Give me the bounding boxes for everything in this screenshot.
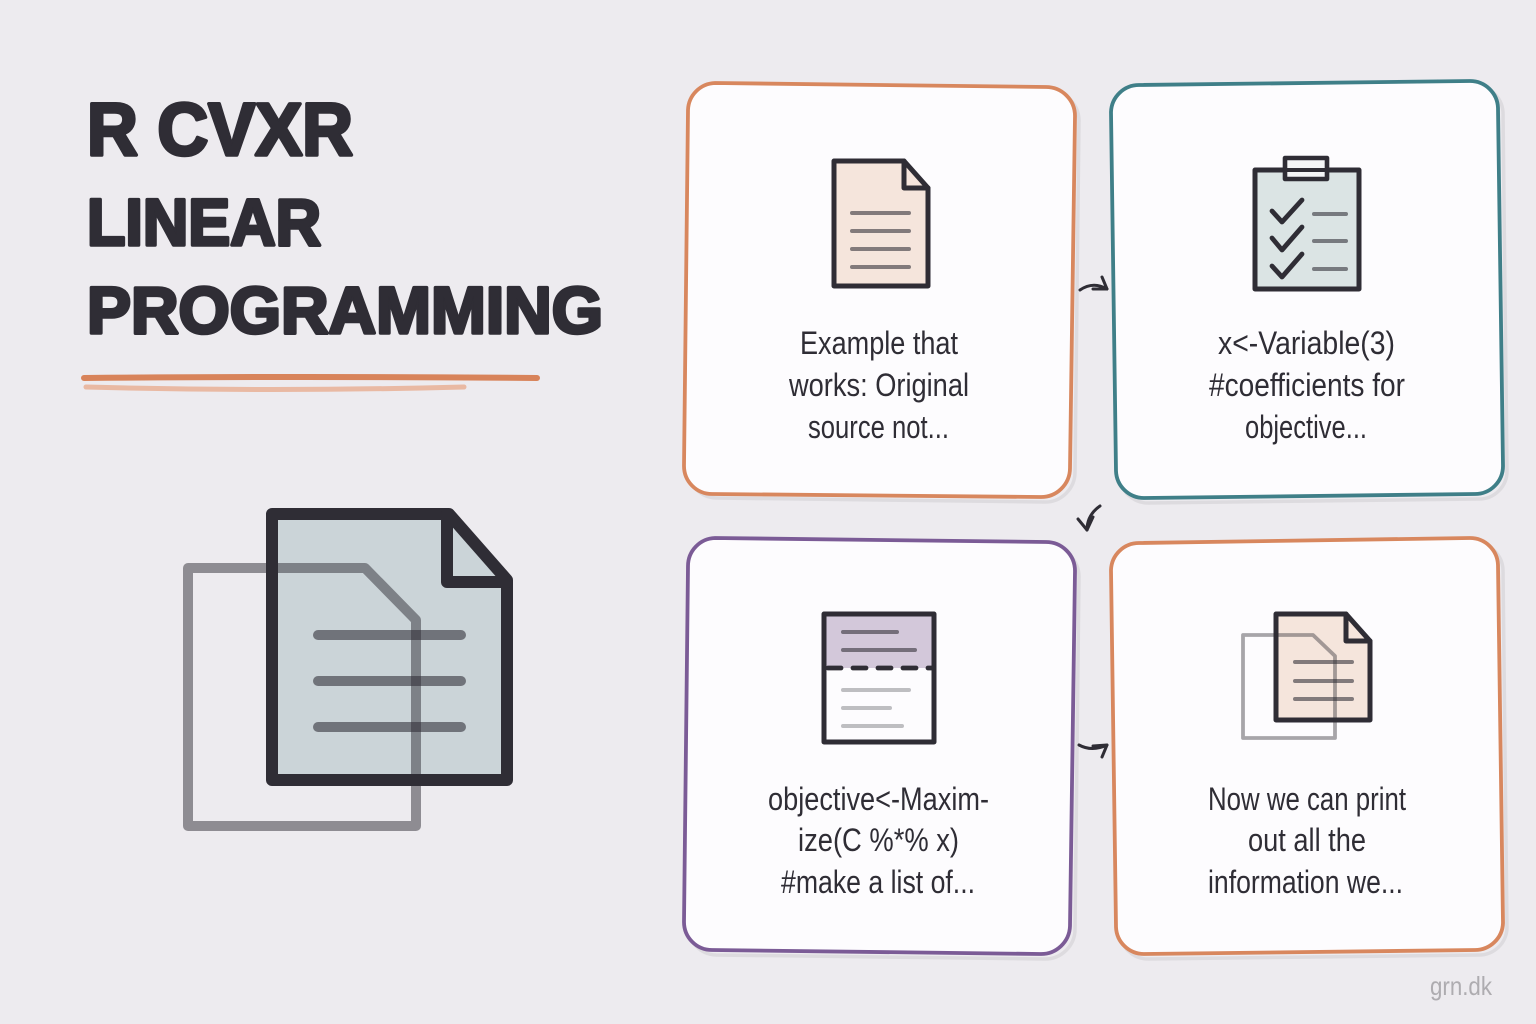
card text bbox=[1208, 781, 1406, 900]
card text: out all the bbox=[1248, 822, 1366, 858]
arrow: variable to objective bbox=[1078, 506, 1100, 530]
icon: document bbox=[834, 161, 928, 286]
card text: #coefficients for bbox=[1209, 367, 1405, 403]
card text bbox=[788, 325, 969, 445]
panel: print bbox=[1111, 538, 1507, 959]
card text bbox=[1209, 325, 1405, 445]
card text: Example that bbox=[800, 325, 958, 361]
panel: example bbox=[684, 83, 1079, 502]
icon: document with copy bbox=[1243, 614, 1370, 738]
card text: #make a list of... bbox=[781, 864, 975, 900]
card text: Now we can print bbox=[1208, 781, 1406, 817]
card text: x<-Variable(3) bbox=[1218, 325, 1395, 361]
title underline bbox=[84, 377, 537, 390]
card border bbox=[684, 83, 1075, 497]
title: PROGRAMMING bbox=[87, 273, 603, 347]
title bbox=[87, 88, 603, 347]
arrow: objective to print bbox=[1079, 745, 1107, 757]
card text bbox=[768, 781, 989, 900]
title: LINEAR bbox=[87, 185, 321, 259]
card border bbox=[1111, 538, 1503, 954]
card border bbox=[684, 538, 1075, 954]
panel: objective bbox=[684, 538, 1079, 959]
card text: source not... bbox=[808, 409, 949, 445]
panel: variable bbox=[1111, 81, 1507, 503]
card text: ize(C %*% x) bbox=[798, 822, 959, 858]
card text: objective... bbox=[1245, 409, 1367, 445]
card border bbox=[1111, 81, 1503, 498]
icon: split document bbox=[824, 614, 934, 742]
arrow: example to variable bbox=[1080, 277, 1107, 290]
card text: works: Original bbox=[788, 367, 969, 403]
watermark: grn.dk bbox=[1430, 971, 1493, 1001]
icon: clipboard checklist bbox=[1255, 158, 1359, 289]
card text: objective<-Maxim- bbox=[768, 781, 989, 817]
icon: large document with copy bbox=[188, 514, 507, 826]
card text: information we... bbox=[1208, 864, 1403, 900]
title: R CVXR bbox=[87, 88, 353, 171]
